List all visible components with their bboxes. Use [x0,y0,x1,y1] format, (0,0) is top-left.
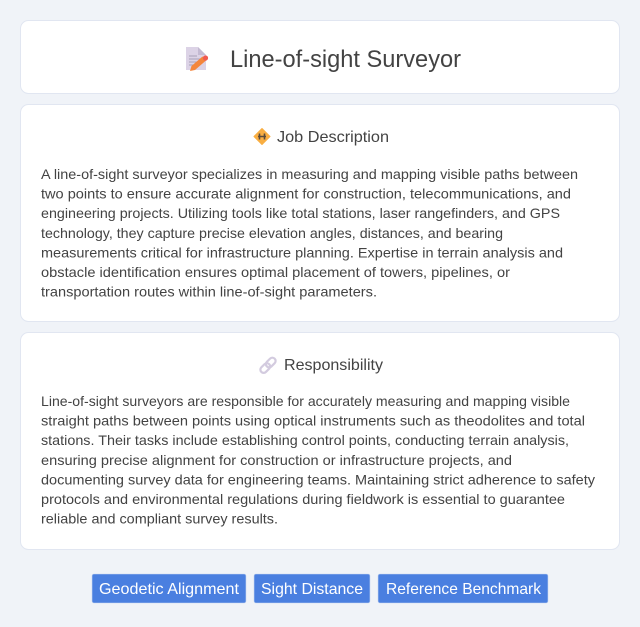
text block: responsibility: reliable and compliant survey results. [41,511,278,527]
text block: responsibility: protocols and environmental regulations during fieldwork is essential to guarantee [41,491,565,507]
panel: job description [20,104,620,322]
text block: responsibility: Line-of-sight surveyors are responsible for accurately measuring and mapping visible [41,393,570,409]
text block: job description: engineering projects. Utilizing tools like total stations, laser rangefinders, and GPS [41,205,560,221]
icon: diamond road sign [254,128,270,144]
tag: Sight Distance: Sight Distance [261,581,363,598]
text block: responsibility: straight paths between points using optical instruments such as theodolites and total [41,413,585,429]
panel: responsibility [20,332,620,550]
panel: title [20,20,620,94]
icon: chain link [259,356,277,374]
text block: job description [41,166,578,300]
text block: job description: technology, they capture precise elevation angles, distances, and bearing [41,225,503,241]
tag: Reference Benchmark: Reference Benchmark [386,581,542,598]
tag: Geodetic Alignment: Geodetic Alignment [99,581,240,598]
icon: document with pencil [186,47,208,71]
text block: job description: obstacle identification ensures optimal placement of towers, pipelines, or [41,264,510,280]
text block: responsibility: documenting survey data for engineering teams. Maintaining strict adherence to safety [41,471,595,487]
tag: Reference Benchmark [378,574,548,603]
text block: responsibility [41,393,595,527]
text block: job description: two points to ensure accurate alignment for construction, telecommunications, and [41,186,571,202]
heading: responsibility: Responsibility [284,357,383,374]
text block: job description: measurements critical for infrastructure planning. Expertise in terrain analysis and [41,244,563,260]
text block: responsibility: stations. Their tasks include establishing control points, conducting terrain analysis, [41,432,569,448]
text block: job description: A line-of-sight surveyor specializes in measuring and mapping visible paths between [41,166,578,182]
tag: Geodetic Alignment [92,574,246,603]
text block: job description: transportation routes within line-of-sight parameters. [41,284,377,300]
heading: job description: Job Description [277,129,389,146]
text block: responsibility: ensuring precise alignment for construction or infrastructure projects, and [41,452,512,468]
heading: title text: Line-of-sight Surveyor [230,46,461,73]
tag: Sight Distance [254,574,370,603]
